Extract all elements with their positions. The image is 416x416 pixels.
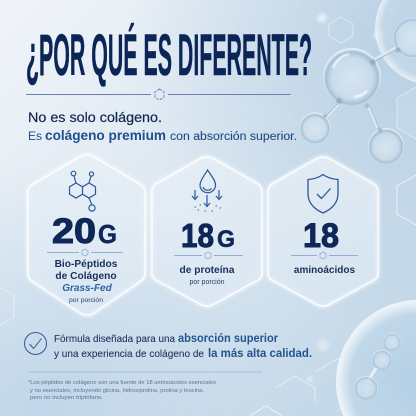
label: bio-peptidos: Bio-Péptidos xyxy=(55,259,118,270)
footnote xyxy=(28,380,216,401)
icon: drop with arrows xyxy=(192,170,222,211)
footnote divider xyxy=(29,371,262,373)
intro text: No es solo colágeno. xyxy=(28,109,162,125)
label: de proteina xyxy=(180,265,235,286)
intro text xyxy=(28,109,297,143)
divider xyxy=(47,249,123,256)
footnote: y no esenciales, incluyendo glicina, hidroxiprolina, prolina y leucina, xyxy=(30,388,204,394)
panel: 20g bio-peptides: G xyxy=(98,219,117,249)
label: bio-peptidos: Grass-Fed xyxy=(62,283,113,294)
callout text xyxy=(54,333,312,360)
label: de proteina: de proteína xyxy=(180,265,235,276)
callout text: absorción superior xyxy=(178,333,278,345)
footnote: *Los péptidos de colágeno son una fuente de 18 aminoácidos esenciales xyxy=(28,380,216,386)
label: aminoacidos: aminoácidos xyxy=(294,265,355,276)
stat: 18g: 18 xyxy=(181,217,214,254)
intro text: con absorción superior. xyxy=(170,131,297,143)
large bubble top right xyxy=(375,0,416,83)
panel: 18g protein xyxy=(152,157,262,306)
icon: shield xyxy=(308,174,338,213)
panel: 18 amino acids xyxy=(268,157,378,306)
panel: 18g protein: G xyxy=(217,226,235,253)
callout text: la más alta calidad. xyxy=(208,346,312,360)
footnote: pero no incluyen triptófano. xyxy=(30,395,103,401)
label: bio-peptidos xyxy=(55,259,118,304)
decorative soft lights xyxy=(307,8,397,382)
panel: 20g bio-peptides xyxy=(28,155,145,315)
icon: molecule xyxy=(70,171,96,211)
icon: check circle xyxy=(24,332,46,354)
label: de proteina: por porción xyxy=(189,279,225,286)
callout text: Fórmula diseñada para una xyxy=(54,333,175,345)
divider xyxy=(291,252,358,259)
callout text: y una experiencia de colágeno de xyxy=(54,348,204,360)
intro text: Es xyxy=(28,129,42,143)
bubble bottom right with molecule xyxy=(336,300,416,416)
stat: 18: 18 xyxy=(303,217,339,255)
molecule illustration xyxy=(300,18,416,164)
stat: 20g: 20 xyxy=(52,212,96,251)
divider xyxy=(174,252,243,259)
label: bio-peptidos: de Colágeno xyxy=(55,271,117,282)
label: bio-peptidos: por porción xyxy=(69,297,103,304)
intro text: colágeno premium xyxy=(45,127,166,143)
title divider xyxy=(26,89,290,100)
